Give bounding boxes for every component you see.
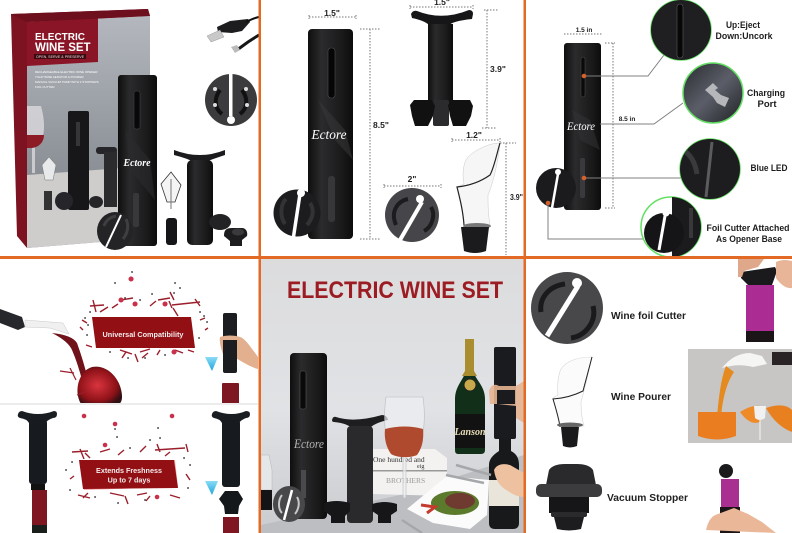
foil cutter [273,486,305,522]
arrow: down bottom [205,481,218,495]
panel: accessories and photos [531,259,792,533]
opener [290,353,327,519]
callout: eject and uncork switch: Up:Eject [726,20,761,31]
callout: charging port: Port [758,99,777,110]
electric opener [118,75,157,246]
callout: blue LED [680,139,788,199]
opener with 8.5 inch height: 1.5" [324,8,340,18]
vacuum pump [174,150,225,245]
vacuum pump with 3.9 inch height [410,0,506,128]
vacuum pump on bottle left [18,411,57,533]
panel: feature callouts [536,0,790,257]
vacuum pump and stopper right [212,411,250,533]
banner: extends freshness: Extends Freshness [96,466,162,475]
opener with 8.5 inch height: Ectore [311,128,346,143]
banner: extends freshness [79,460,178,490]
book stack [373,449,447,496]
gift box [11,9,150,248]
icon: usb cable [207,17,259,53]
wine pouring [0,309,122,404]
callout: foil cutter base: As Opener Base [716,234,782,245]
callout: charging port [683,63,785,123]
plate with food [402,465,491,533]
label: vacuum stopper: Vacuum Stopper [607,493,688,504]
callout: blue LED: Blue LED [750,163,788,174]
foil cutter with 2 inch width: 2" [408,174,416,184]
vacuum stoppers [209,214,247,246]
wine pourer [161,172,181,245]
panel: compatibility and freshness [0,272,258,533]
vacuum stopper item [536,464,602,530]
opener with callout points: 1.5 in [576,27,592,34]
opener with callout points: 8.5 in [619,116,635,123]
banner: extends freshness: Up to 7 days [108,476,150,484]
label: wine pourer: Wine Pourer [611,392,671,403]
vacuum pump [324,415,397,523]
electric opener: Ectore [123,157,151,169]
champagne bottle [453,339,486,454]
pourer small [261,455,272,510]
foil cutter [97,212,133,250]
pourer with 3.9 inch height [452,130,523,255]
gift box: FOIL CUTTER [35,85,55,89]
opener with callout points [536,27,683,239]
heading: ELECTRIC WINE SET [287,277,503,304]
wine pourer item [553,357,592,448]
foil cutter item [531,272,603,344]
photo: pouring juice [688,349,792,443]
icon: foil cutter back [205,74,257,126]
opener on wine bottle [489,347,524,529]
gift box: WINE SET [35,42,91,54]
foil cutter beside opener [274,189,320,240]
divider line [0,403,258,405]
vacuum pump with 3.9 inch height: 3.9" [490,64,506,74]
opener with 8.5 inch height: 8.5" [373,120,389,130]
gift box: RECHARGEABLE ELECTRIC WINE OPENER [35,70,98,74]
wine splash top [80,272,208,362]
book stack: One hundred and [373,455,425,464]
banner: universal compatibility [92,317,195,348]
foil cutter with 2 inch width [384,174,441,242]
pourer with 3.9 inch height: 1.2" [466,130,482,140]
champagne bottle: Lanson [453,427,486,438]
book stack: eig [417,464,424,470]
opener on bottle with hand [220,313,258,404]
panel: electric wine set lifestyle [261,259,524,533]
arrow: down top [205,357,218,371]
gift box: ELECTRIC [35,32,85,43]
gift box: OPEN, SERVE & PRESERVE [36,55,85,59]
callout: eject and uncork switch: Down:Uncork [716,31,773,42]
opener: Ectore [293,436,324,451]
banner: universal compatibility: Universal Compatibility [102,330,184,339]
callout: foil cutter base [641,197,790,257]
book stack: BROTHERS [386,476,425,485]
gift box: MANUAL VACUUM PUMP WITH 2 STOPPERS [35,80,99,84]
table surface [261,455,524,533]
opener with 8.5 inch height [308,8,389,239]
callout: charging port: Charging [747,88,785,99]
panel: product box and contents [11,9,259,250]
photo: stopper on bottle [738,259,792,342]
callout: eject and uncork switch [651,0,773,60]
gift box: TULIP WINE AERATOR & POURER [35,75,84,79]
photo: hand holding stoppered bottle [706,464,776,533]
pourer with 3.9 inch height: 3.9" [510,192,523,202]
opener with callout points: Ectore [566,121,595,133]
panel: dimensions [274,0,523,255]
wine splash bottom [66,416,190,504]
label: wine foil cutter: Wine foil Cutter [611,311,686,322]
wine glass [385,397,424,498]
